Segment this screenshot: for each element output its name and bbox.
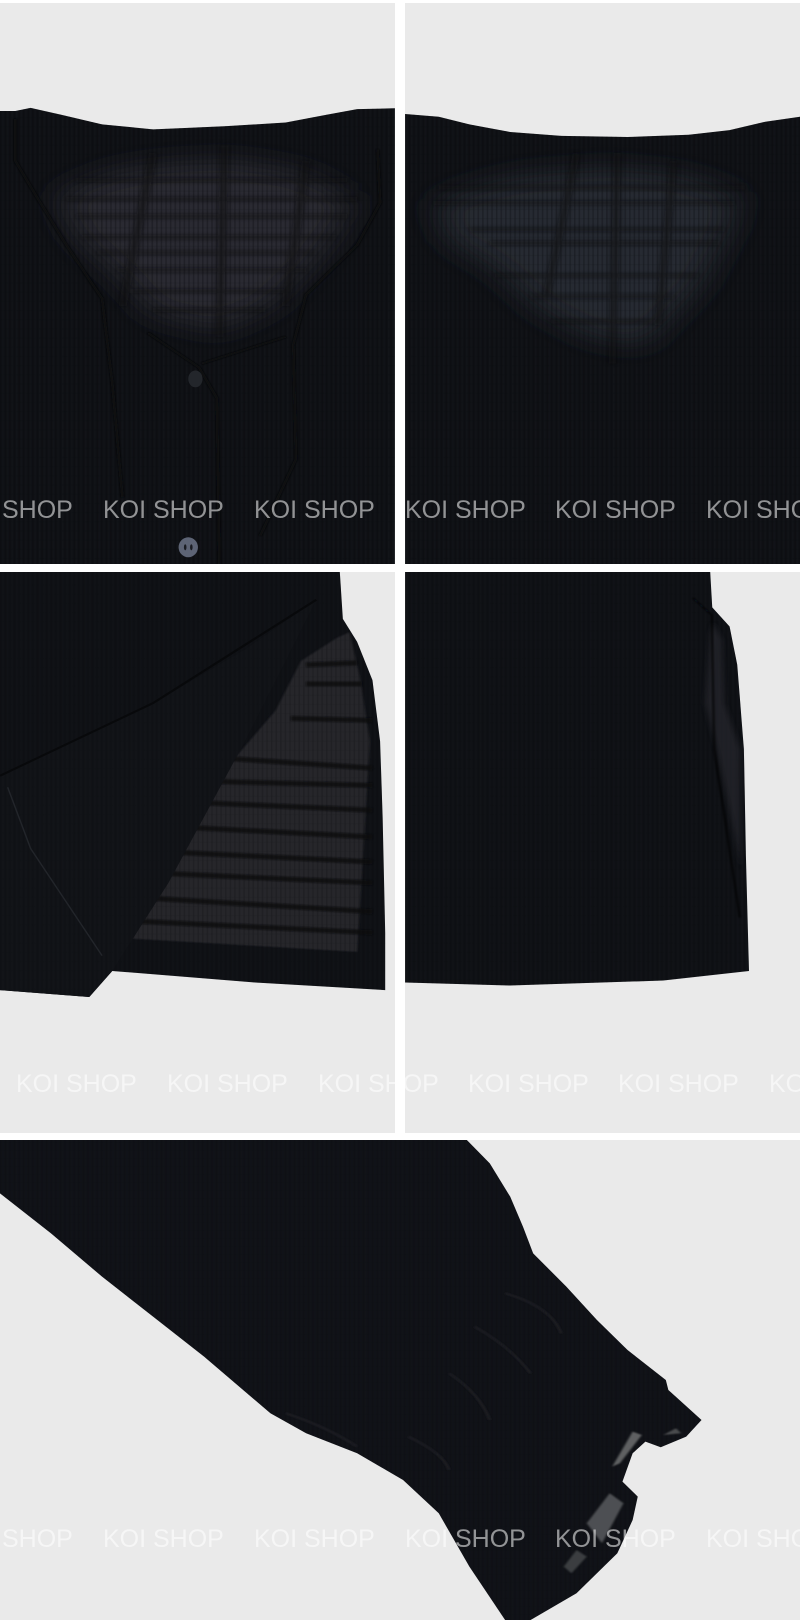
watermark row 2: KOI SHOP [16,1070,137,1098]
garment: back bodice [405,114,800,564]
watermark row 1: KOI SHOP [103,496,224,524]
fabric rib texture [405,572,749,986]
watermark row 3: KOI SHOP [405,1525,526,1553]
watermark row 1 [0,496,800,524]
watermark row 3: KOI SHOP [103,1525,224,1553]
watermark row 2: KOI SHOP [468,1070,589,1098]
watermark row 1: KOI SHOP [555,496,676,524]
watermark row 3: KOI SHOP [555,1525,676,1553]
sheer back panel [130,632,372,952]
fabric rib texture [18,108,394,320]
watermark row 3: KOI SHOP [254,1525,375,1553]
panel: neckline front detail [0,3,395,564]
sheer cuff highlight lower [587,1493,623,1543]
sheer side strip [705,623,741,868]
garment: back layer and hem [0,572,385,997]
watermark row 2 [16,1070,800,1098]
button upper [188,370,203,387]
flap stitched edge [0,600,316,956]
watermark row 3 [0,1525,800,1553]
sheer yoke area [56,145,357,337]
sheer cuff highlight upper [612,1432,642,1467]
watermark row 2: KOI SHOP [318,1070,439,1098]
gathered cuff wrinkles [286,1293,561,1470]
garment: sleeve [0,1140,702,1620]
fabric rib texture [405,114,800,564]
watermark row 1: KOI SHOP [254,496,375,524]
panel: sleeve cuff detail [0,1140,800,1620]
sheer cuff highlight tip [663,1428,681,1435]
button lower [179,537,198,557]
watermark row 2: KOI SHOP [618,1070,739,1098]
tie cords [15,119,380,564]
fabric rib texture [70,1156,690,1614]
panel: neckline back detail [405,3,800,564]
panel: front hem slit [0,572,395,1133]
slit line [693,598,740,917]
fabric rib texture [115,577,382,990]
panel: back hem slit [405,572,800,1133]
folded front flap [0,761,234,997]
garment: front bodice [0,108,395,564]
garment: back skirt [405,572,749,986]
sheer cuff highlight base [564,1550,587,1573]
watermark row 1: KOI SHOP [405,496,526,524]
sheer yoke area [433,163,743,347]
watermark row 2: KOI SHOP [167,1070,288,1098]
